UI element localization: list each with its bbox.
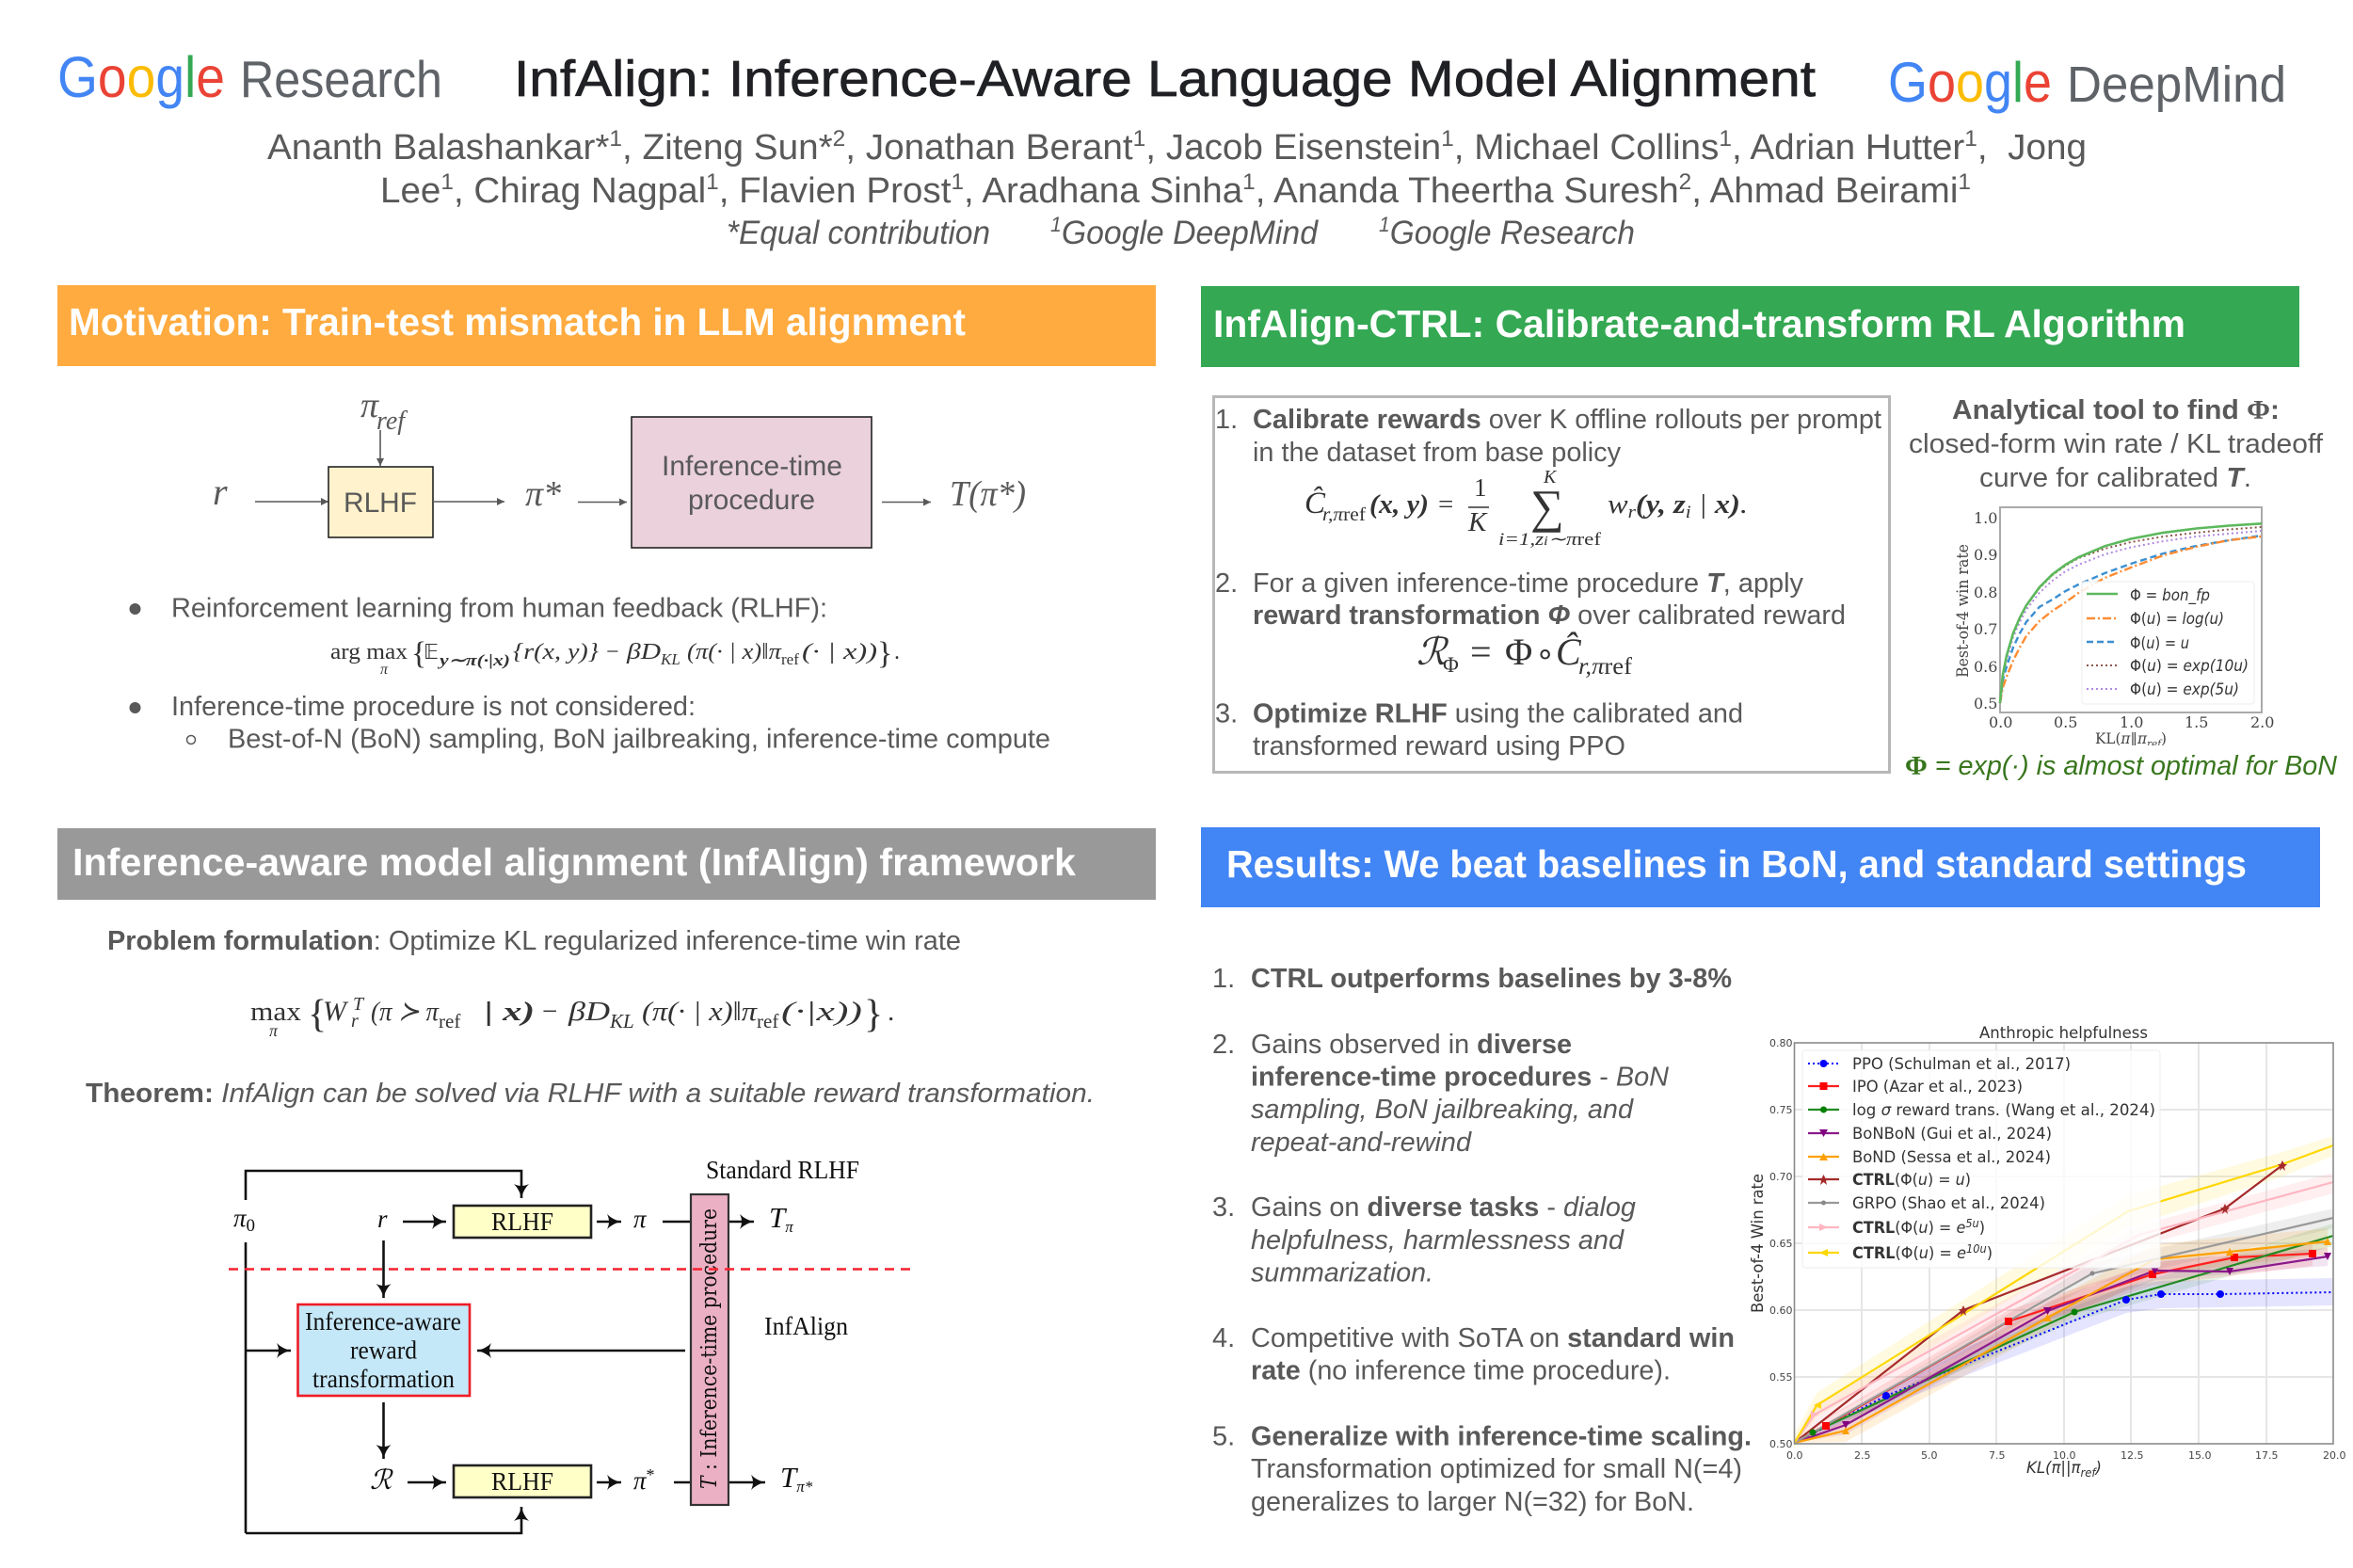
diagram: RLHF to inference-time procedure: procedure [688,485,815,516]
authors and affiliations: 1 [1958,169,1971,195]
authors and affiliations: , Ziteng Sun* [622,128,833,168]
axis labels and ticks: 0.80 [1769,1037,1792,1049]
legend [1802,1050,2160,1268]
equation: calibrated reward: w [1608,489,1625,520]
axis labels and ticks: 7.5 [1989,1449,2005,1462]
logo: Google Research: Google [57,45,225,109]
numbered findings: 4. [1212,1323,1235,1353]
numbered findings: 3. [1212,1192,1235,1223]
legend: Φ = bon_fp [2130,586,2210,605]
heading bar: CTRL [1201,286,2299,367]
algorithm box: 2. [1215,568,1238,599]
analytical tool caption [1909,395,2324,493]
flow diagram: standard RLHF vs InfAlign: r [377,1205,388,1233]
diagram: RLHF to inference-time procedure: RLHF [344,488,417,519]
axis tick labels: 1.5 [2185,713,2208,731]
equation: RLHF objective: . [894,640,900,664]
legend: IPO (Azar et al., 2023) [1852,1078,2023,1096]
box: inference-aware reward transformation: Inference-aware [305,1307,461,1336]
numbered findings: 5. [1212,1421,1235,1451]
authors and affiliations: , Michael Collins [1454,128,1719,168]
numbered findings: helpfulness, harmlessness and [1251,1225,1625,1256]
box: inference-aware reward transformation: reward [350,1336,417,1365]
equation: calibrated reward: i=1,z i∼π ref [1498,530,1602,550]
legend: Φ(u) = u [2130,634,2189,653]
numbered findings: Gains observed in diverse [1251,1030,1572,1060]
authors and affiliations: , Jacob Eisenstein [1145,128,1441,168]
problem formulation: Problem formulation: Optimize KL regularized inference-time win rate [107,926,961,956]
panel: InfAlign framework [57,828,1156,1533]
numbered findings: generalizes to larger N(=32) for BoN. [1251,1487,1694,1517]
authors and affiliations: 2 [833,126,845,152]
equation: KL regularized win rate: KL [609,1010,634,1032]
legend: log σ reward trans. (Wang et al., 2024) [1852,1101,2155,1120]
authors and affiliations: Lee [380,171,440,211]
numbered findings: Gains on diverse tasks - dialog [1251,1192,1636,1223]
diagram: RLHF to inference-time procedure: ref [376,407,408,436]
equation: KL regularized win rate: { [308,993,327,1036]
authors and affiliations: 1 [1964,126,1977,152]
equation: RLHF objective: (· | x)) [802,640,877,664]
equation: KL regularized win rate: ref [757,1010,778,1032]
flow diagram: standard RLHF vs InfAlign: * [647,1465,655,1484]
equation: KL regularized win rate: } [864,993,883,1036]
box: standard RLHF [454,1206,591,1238]
equation: RLHF objective [330,636,900,678]
legend: ) [1979,1219,1985,1238]
equation: calibrated reward: = [1438,489,1453,520]
authors and affiliations: 1 [1050,213,1062,236]
flow diagram: standard RLHF vs InfAlign: π [633,1466,647,1495]
line chart: Anthropic helpfulness [1749,1024,2345,1480]
panel: motivation [57,285,1156,755]
equation: KL regularized win rate: ref [439,1010,460,1032]
axis labels and ticks [1749,1037,2345,1480]
legend: Φ(u) = exp(10u) [2130,657,2249,676]
axis labels and ticks: 2.5 [1854,1449,1871,1462]
box: inference-aware reward transformation: transformation [312,1365,455,1393]
flow diagram: standard RLHF vs InfAlign: π [785,1218,793,1236]
flow diagram: standard RLHF vs InfAlign: InfAlign [764,1312,848,1340]
diagram: RLHF to inference-time procedure: r [213,471,228,513]
confidence bands [1794,1136,2333,1449]
legend: CTRL(Φ(u) = e [1852,1219,1966,1238]
axis tick labels: 0.5 [1974,695,1997,712]
takeaway: exp is almost optimal: Φ = exp(·) is almost optimal for BoN [1905,751,2337,781]
panel: results [1201,827,2345,1517]
authors and affiliations: 2 [1679,169,1691,195]
heading bar: framework [57,828,1156,900]
equation: calibrated reward: r [1628,503,1637,522]
axis tick labels: 0.5 [2054,713,2077,731]
numbered findings: rate (no inference time procedure). [1251,1355,1671,1385]
equation: calibrated reward: | [1691,489,1715,520]
equation: calibrated reward: i [1686,503,1691,522]
line chart: win rate vs KL tradeoff: Best-of-4 win rate [1954,544,1973,678]
authors and affiliations: 1 [1441,126,1454,152]
axis labels and ticks: KL(π||π [2026,1459,2082,1478]
legend: BoNBoN (Gui et al., 2024) [1852,1125,2052,1144]
algorithm box: Calibrate rewards over K offline rollouts per prompt [1253,405,1881,435]
axis labels and ticks: 10.0 [2053,1449,2076,1462]
axis tick labels: 0.7 [1974,620,1997,638]
equation: calibrated reward: Ĉ [1305,485,1326,520]
legend: BoND (Sessa et al., 2024) [1852,1148,2051,1167]
heading bar: motivation [57,285,1156,366]
numbered findings: 2. [1212,1030,1235,1060]
equation: calibrated reward: (x, y) [1369,489,1429,520]
numbered findings: Transformation optimized for small N(=4) [1251,1454,1742,1484]
flow diagram: standard RLHF vs InfAlign: π [233,1204,247,1232]
authors and affiliations: Google Research [1390,215,1635,251]
flow diagram: standard RLHF vs InfAlign: Standard RLHF [706,1156,859,1184]
equation: KL regularized win rate: (π(· | x)‖π [642,997,759,1027]
axis tick labels [1974,509,2274,731]
equation: transformed reward: Φ [1443,653,1459,677]
heading bar: CTRL: InfAlign-CTRL: Calibrate-and-transform RL Algorithm [1213,302,2185,345]
equation: KL regularized win rate: T [353,994,365,1015]
axis labels and ticks: 0.65 [1769,1238,1792,1250]
algorithm box: 3. [1215,698,1238,728]
authors and affiliations: *Equal contribution [727,215,990,251]
authors and affiliations: Google DeepMind [1062,215,1319,251]
algorithm box: Optimize RLHF using the calibrated and [1253,698,1743,728]
equation: calibrated reward: (y, z [1636,489,1687,520]
panel: InfAlign-CTRL [1201,286,2337,781]
equation: calibrated reward: K [1543,467,1558,488]
axis labels and ticks: 15.0 [2188,1449,2212,1462]
authors and affiliations: , Jong [1977,128,2087,168]
axis labels and ticks: 17.5 [2255,1449,2278,1462]
equation: RLHF objective: βD [626,640,661,664]
legend: GRPO (Shao et al., 2024) [1852,1194,2045,1213]
equation: calibrated reward [1305,467,1748,550]
axis tick labels: 1.0 [2120,713,2143,731]
equation: transformed reward: Ĉ [1556,631,1582,673]
bullet list: motivation: Reinforcement learning from human feedback (RLHF): [171,593,827,623]
equation: KL regularized win rate: max [250,997,302,1027]
legend: 10u [1966,1242,1987,1256]
equation: calibrated reward: 1 [1474,473,1487,502]
equation: RLHF objective: − [606,640,619,664]
numbered findings: inference-time procedures - BoN [1251,1062,1669,1092]
equation: calibrated reward: K [1467,507,1488,537]
box: inference-aware reward transformation [297,1304,470,1396]
equation: KL regularized win rate: . [888,997,894,1027]
axis tick labels: 2.0 [2250,713,2274,731]
authors and affiliations: 1 [951,169,964,195]
equation: KL regularized win rate: − [542,997,557,1027]
analytical tool caption: Analytical tool to find Φ: [1952,395,2280,425]
title: InfAlign: Inference-Aware Language Model Alignment [514,51,1816,107]
logo: Google Research [57,45,442,109]
chart title: Anthropic helpfulness [1979,1024,2148,1043]
authors and affiliations: , Flavien Prost [719,171,952,211]
axis labels and ticks: 0.50 [1769,1438,1792,1450]
flow diagram: standard RLHF vs InfAlign: π* [796,1478,813,1496]
legend: ) [1987,1244,1993,1263]
numbered findings: Generalize with inference-time scaling. [1251,1421,1752,1451]
axis labels and ticks: 0.60 [1769,1304,1792,1317]
axis labels and ticks: Best-of-4 Win rate [1749,1174,1768,1313]
axes frame [1794,1043,2333,1444]
line chart: win rate vs KL tradeoff [1954,507,2274,753]
axis tick labels: 0.8 [1974,584,1997,601]
logo: Google Research: Research [240,50,442,108]
authors and affiliations: 1 [1719,126,1732,152]
legend: CTRL(Φ(u) = u) [1852,1171,1971,1190]
diagram: RLHF to inference-time procedure: π [360,386,379,425]
diagram: RLHF to inference-time procedure: Inference-time [662,451,842,482]
equation: RLHF objective: { [411,636,426,671]
axis labels and ticks: 0.0 [1786,1449,1803,1462]
bar: inference-time procedure: T : Inference-time procedure [697,1208,722,1489]
equation: KL regularized win rate: (π ≻ π [371,997,440,1027]
flow diagram: standard RLHF vs InfAlign [229,1156,914,1533]
equation: RLHF objective: } [877,636,892,671]
line chart: win rate vs KL tradeoff: ref [2147,738,2163,750]
heading bar: results [1201,827,2320,907]
legend: 5u [1965,1217,1979,1230]
axis tick labels: 0.9 [1974,546,1997,564]
flow diagram: standard RLHF vs InfAlign: ℛ [370,1465,393,1496]
equation: KL regularized win rate: (·|x)) [781,997,862,1027]
numbered findings: sampling, BoN jailbreaking, and [1251,1095,1634,1125]
authors and affiliations: 1 [1133,126,1145,152]
series lines [1794,1292,2333,1443]
authors and affiliations: , Ananda Theertha Suresh [1256,171,1679,211]
authors and affiliations: , Jonathan Berant [845,128,1133,168]
equation: transformed reward [1417,631,1633,680]
axis labels and ticks: ref [2080,1466,2097,1480]
axis tick labels: 0.0 [1989,713,2012,731]
bullet list: motivation: Inference-time procedure is not considered: [171,692,696,722]
axis labels and ticks: 0.75 [1769,1104,1792,1116]
heading bar: results: Results: We beat baselines in BoN, and standard settings [1226,842,2247,886]
axis tick labels: 0.6 [1974,658,1997,676]
equation: RLHF objective: {r(x, y)} [513,640,599,664]
theorem: Theorem: InfAlign can be solved via RLHF with a suitable reward transformation. [86,1079,1095,1109]
flow diagram: standard RLHF vs InfAlign: T [780,1461,796,1494]
equation: KL regularized win rate: W [323,996,349,1027]
authors and affiliations: 1 [609,126,622,152]
algorithm box: 1. [1215,405,1238,435]
equation: calibrated reward: x). [1715,489,1747,520]
flow diagram: standard RLHF vs InfAlign: π [633,1205,648,1233]
logo: Google DeepMind: DeepMind [2067,56,2286,113]
equation: RLHF objective: y∼π(·|x) [437,651,510,669]
box: standard RLHF: RLHF [491,1208,553,1236]
numbered findings: summarization. [1251,1257,1433,1288]
authors and affiliations: 1 [706,169,719,195]
equation: KL regularized win rate: | x) [485,997,535,1027]
legend: PPO (Schulman et al., 2017) [1852,1055,2071,1074]
axis labels and ticks: 0.55 [1769,1371,1792,1384]
logo: Google DeepMind: Google [1888,51,2052,114]
authors and affiliations: 1 [440,169,454,195]
equation: KL regularized win rate [250,993,894,1040]
equation: KL regularized win rate: π [269,1021,279,1040]
flow diagram: standard RLHF vs InfAlign: T [769,1201,785,1234]
legend [2082,582,2254,704]
equation: transformed reward: ∘ [1535,637,1555,672]
equation: RLHF objective: arg max [330,640,408,664]
authors and affiliations: , Ahmad Beirami [1691,171,1958,211]
diagram: RLHF to inference-time procedure: T(π*) [950,474,1026,514]
equation: transformed reward: Φ [1505,631,1532,673]
authors and affiliations: , Aradhana Sinha [964,171,1243,211]
equation: KL regularized win rate: r [351,1011,359,1032]
authors and affiliations [267,126,2087,251]
algorithm box: reward transformation Φ over calibrated reward [1253,600,1846,631]
algorithm box: For a given inference-time procedure T, apply [1253,568,1803,599]
equation: calibrated reward: r,πref [1322,504,1366,525]
diagram: RLHF to inference-time procedure [213,386,1026,548]
line chart: win rate vs KL tradeoff: KL(π‖π [2095,729,2148,747]
equation: RLHF objective: 𝔼 [424,640,439,664]
numbered findings: 1. [1212,964,1235,994]
algorithm box: in the dataset from base policy [1253,438,1621,468]
authors and affiliations: Ananth Balashankar* [267,128,603,168]
authors and affiliations: 1 [1242,169,1256,195]
axis labels and ticks: ) [2094,1459,2102,1478]
legend: CTRL(Φ(u) = e [1852,1244,1967,1263]
authors and affiliations: 1 [1379,213,1390,236]
axis labels and ticks: 12.5 [2121,1449,2144,1462]
axis tick labels: 1.0 [1974,509,1997,527]
equation: RLHF objective: (π(· | x)‖π [687,640,782,664]
equation: RLHF objective: KL [660,650,680,668]
heading bar: motivation: Motivation: Train-test mismatch in LLM alignment [69,300,966,344]
algorithm box: transformed reward using PPO [1253,731,1625,761]
flow diagram: standard RLHF vs InfAlign: 0 [247,1216,255,1236]
numbered findings: repeat-and-rewind [1251,1128,1472,1158]
equation: calibrated reward: ∑ [1530,480,1564,533]
bullet list: motivation: Best-of-N (BoN) sampling, BoN jailbreaking, inference-time compute [228,725,1050,755]
equation: transformed reward: ℛ [1417,631,1449,673]
heading bar: framework: Inference-aware model alignment (InfAlign) framework [72,840,1076,884]
analytical tool caption: curve for calibrated T. [1979,463,2251,493]
diagram: RLHF to inference-time procedure: π* [525,474,561,514]
equation: KL regularized win rate: βD [568,997,610,1027]
series markers [1809,1160,2331,1436]
axis labels and ticks: 5.0 [1921,1449,1937,1462]
equation: RLHF objective: π [380,662,389,678]
authors and affiliations: , Chirag Nagpal [454,171,706,211]
box: RLHF with transformed reward: RLHF [491,1467,553,1496]
bullet list: motivation [130,593,1050,755]
legend: Φ(u) = exp(5u) [2130,680,2239,699]
equation: RLHF objective: ref [781,650,799,668]
line chart: win rate vs KL tradeoff: ) [2161,729,2167,747]
logo: Google DeepMind [1888,51,2286,114]
numbered findings: CTRL outperforms baselines by 3-8% [1251,964,1732,994]
algorithm box [1214,397,1890,772]
equation: transformed reward: = [1470,631,1492,673]
equation: transformed reward: r,πref [1578,654,1633,680]
axis labels and ticks: 20.0 [2323,1449,2345,1462]
axis labels and ticks: 0.70 [1769,1171,1792,1183]
authors and affiliations: , Adrian Hutter [1732,128,1965,168]
numbered findings [1212,964,1752,1517]
bar: inference-time procedure [691,1194,728,1505]
box: RLHF with transformed reward [454,1465,591,1497]
analytical tool caption: closed-form win rate / KL tradeoff [1909,429,2324,459]
numbered findings: Competitive with SoTA on standard win [1251,1323,1735,1353]
legend: Φ(u) = log(u) [2130,610,2224,629]
